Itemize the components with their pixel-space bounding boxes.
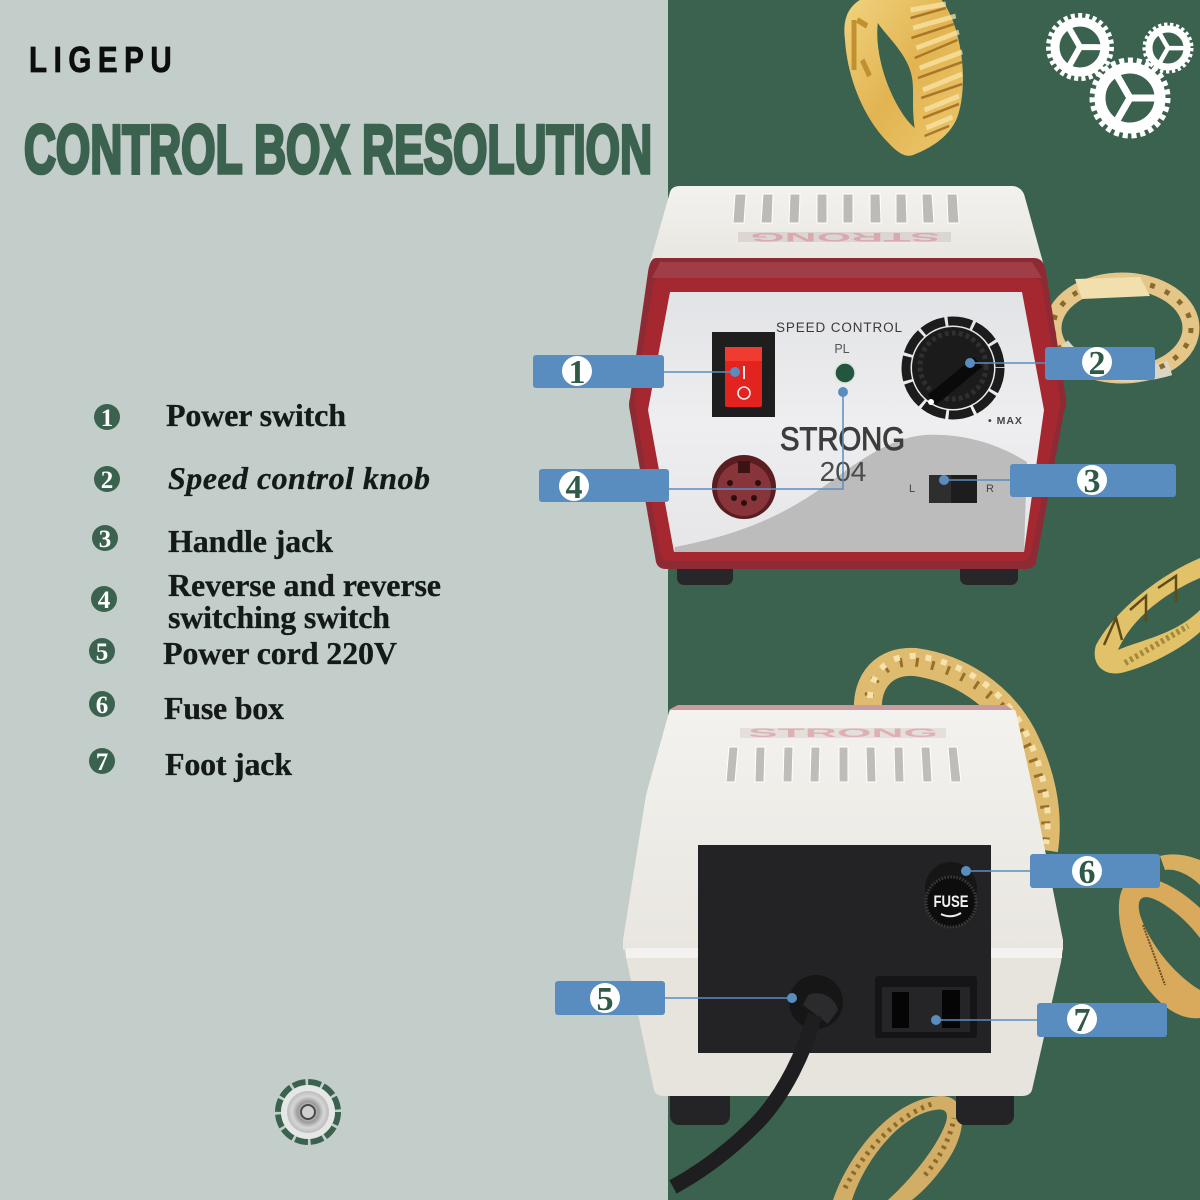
red rim [669, 705, 1013, 710]
left panel background [0, 0, 668, 1200]
callout 7 [931, 1002, 1167, 1039]
top label: STRONG [748, 726, 938, 740]
speed knob [906, 321, 1000, 415]
model number: 204 [820, 456, 866, 487]
control plate [648, 292, 1044, 552]
ring: engraved gold band [1119, 854, 1200, 1018]
legend item 4 [91, 567, 441, 635]
legend item 7: Foot jack [165, 746, 292, 782]
top label [738, 230, 951, 244]
legend item 1: 1 [101, 405, 113, 432]
callout 4: 4 [566, 469, 582, 506]
callout 4 [539, 387, 848, 506]
direction switch [909, 475, 994, 503]
box top cover [649, 186, 1044, 266]
legend item 3: 3 [99, 526, 111, 553]
top label: STRONG [750, 230, 940, 244]
fuse holder: FUSE [934, 892, 968, 911]
control box front view [629, 186, 1066, 585]
handle jack [712, 455, 776, 519]
brand name: LIGEPU [29, 39, 178, 80]
legend item 4: switching switch [168, 599, 390, 635]
red front frame [629, 258, 1066, 569]
legend item 5: 5 [96, 639, 108, 666]
legend item 4: 4 [98, 587, 111, 614]
direction switch: L [909, 483, 915, 495]
legend item 5: Power cord 220V [163, 635, 397, 671]
legend item 7 [89, 746, 292, 782]
right panel background [668, 0, 1200, 1200]
legend item 6 [89, 690, 284, 726]
power switch [712, 332, 775, 417]
max label: • MAX [988, 415, 1023, 427]
callout 5: 5 [596, 981, 614, 1018]
black rear panel [698, 845, 991, 1053]
ring: gold chain ring [1053, 277, 1191, 375]
top label [740, 726, 946, 740]
icon: white gears [1048, 14, 1191, 135]
legend item 2: Speed control knob [168, 460, 430, 496]
fuse holder [925, 862, 977, 927]
callout 2: 2 [1088, 345, 1106, 382]
rear feet [670, 1088, 1014, 1125]
legend item 4: Reverse and reverse [168, 567, 441, 603]
icon: small metal gear [278, 1082, 338, 1142]
power cord [673, 975, 843, 1187]
callout 1 [533, 354, 740, 391]
callout 3 [939, 463, 1176, 500]
brand logo: STRONG [780, 421, 905, 457]
callout 2 [965, 345, 1155, 382]
legend item 6: Fuse box [164, 690, 284, 726]
legend item 3: Handle jack [168, 523, 333, 559]
callout 6 [961, 854, 1160, 891]
legend item 3 [92, 523, 333, 559]
plate gray wave [674, 435, 1027, 552]
indicator LED [835, 363, 855, 383]
seam highlight [626, 948, 1062, 958]
callout 6: 6 [1078, 854, 1096, 891]
callout 5 [555, 981, 797, 1018]
ring: patterned gold bangle [1095, 558, 1200, 673]
ring: gold rope ring [868, 656, 1048, 850]
ventilation slots [733, 194, 959, 223]
legend item 2: 2 [101, 467, 113, 494]
rear upper shell [623, 708, 1063, 950]
PL label: PL [834, 342, 850, 356]
legend item 7: 7 [96, 749, 108, 776]
rear lower shell [624, 947, 1063, 1096]
ventilation slots [726, 747, 961, 782]
direction switch: R [986, 483, 994, 495]
ring: ribbed gold ring [844, 0, 963, 156]
callout 7: 7 [1074, 1002, 1090, 1039]
legend list [89, 397, 441, 782]
legend item 6: 6 [96, 692, 108, 719]
foot jack socket [875, 976, 977, 1038]
title: CONTROL BOX RESOLUTION [24, 111, 652, 188]
control box rear view [623, 705, 1063, 1187]
callout 3: 3 [1084, 463, 1100, 500]
legend item 1: Power switch [166, 397, 346, 433]
callout 1: 1 [568, 354, 586, 391]
ring: gold chain bangle [833, 1096, 962, 1200]
front feet [677, 562, 1018, 585]
speed control label: SPEED CONTROL [776, 320, 902, 335]
